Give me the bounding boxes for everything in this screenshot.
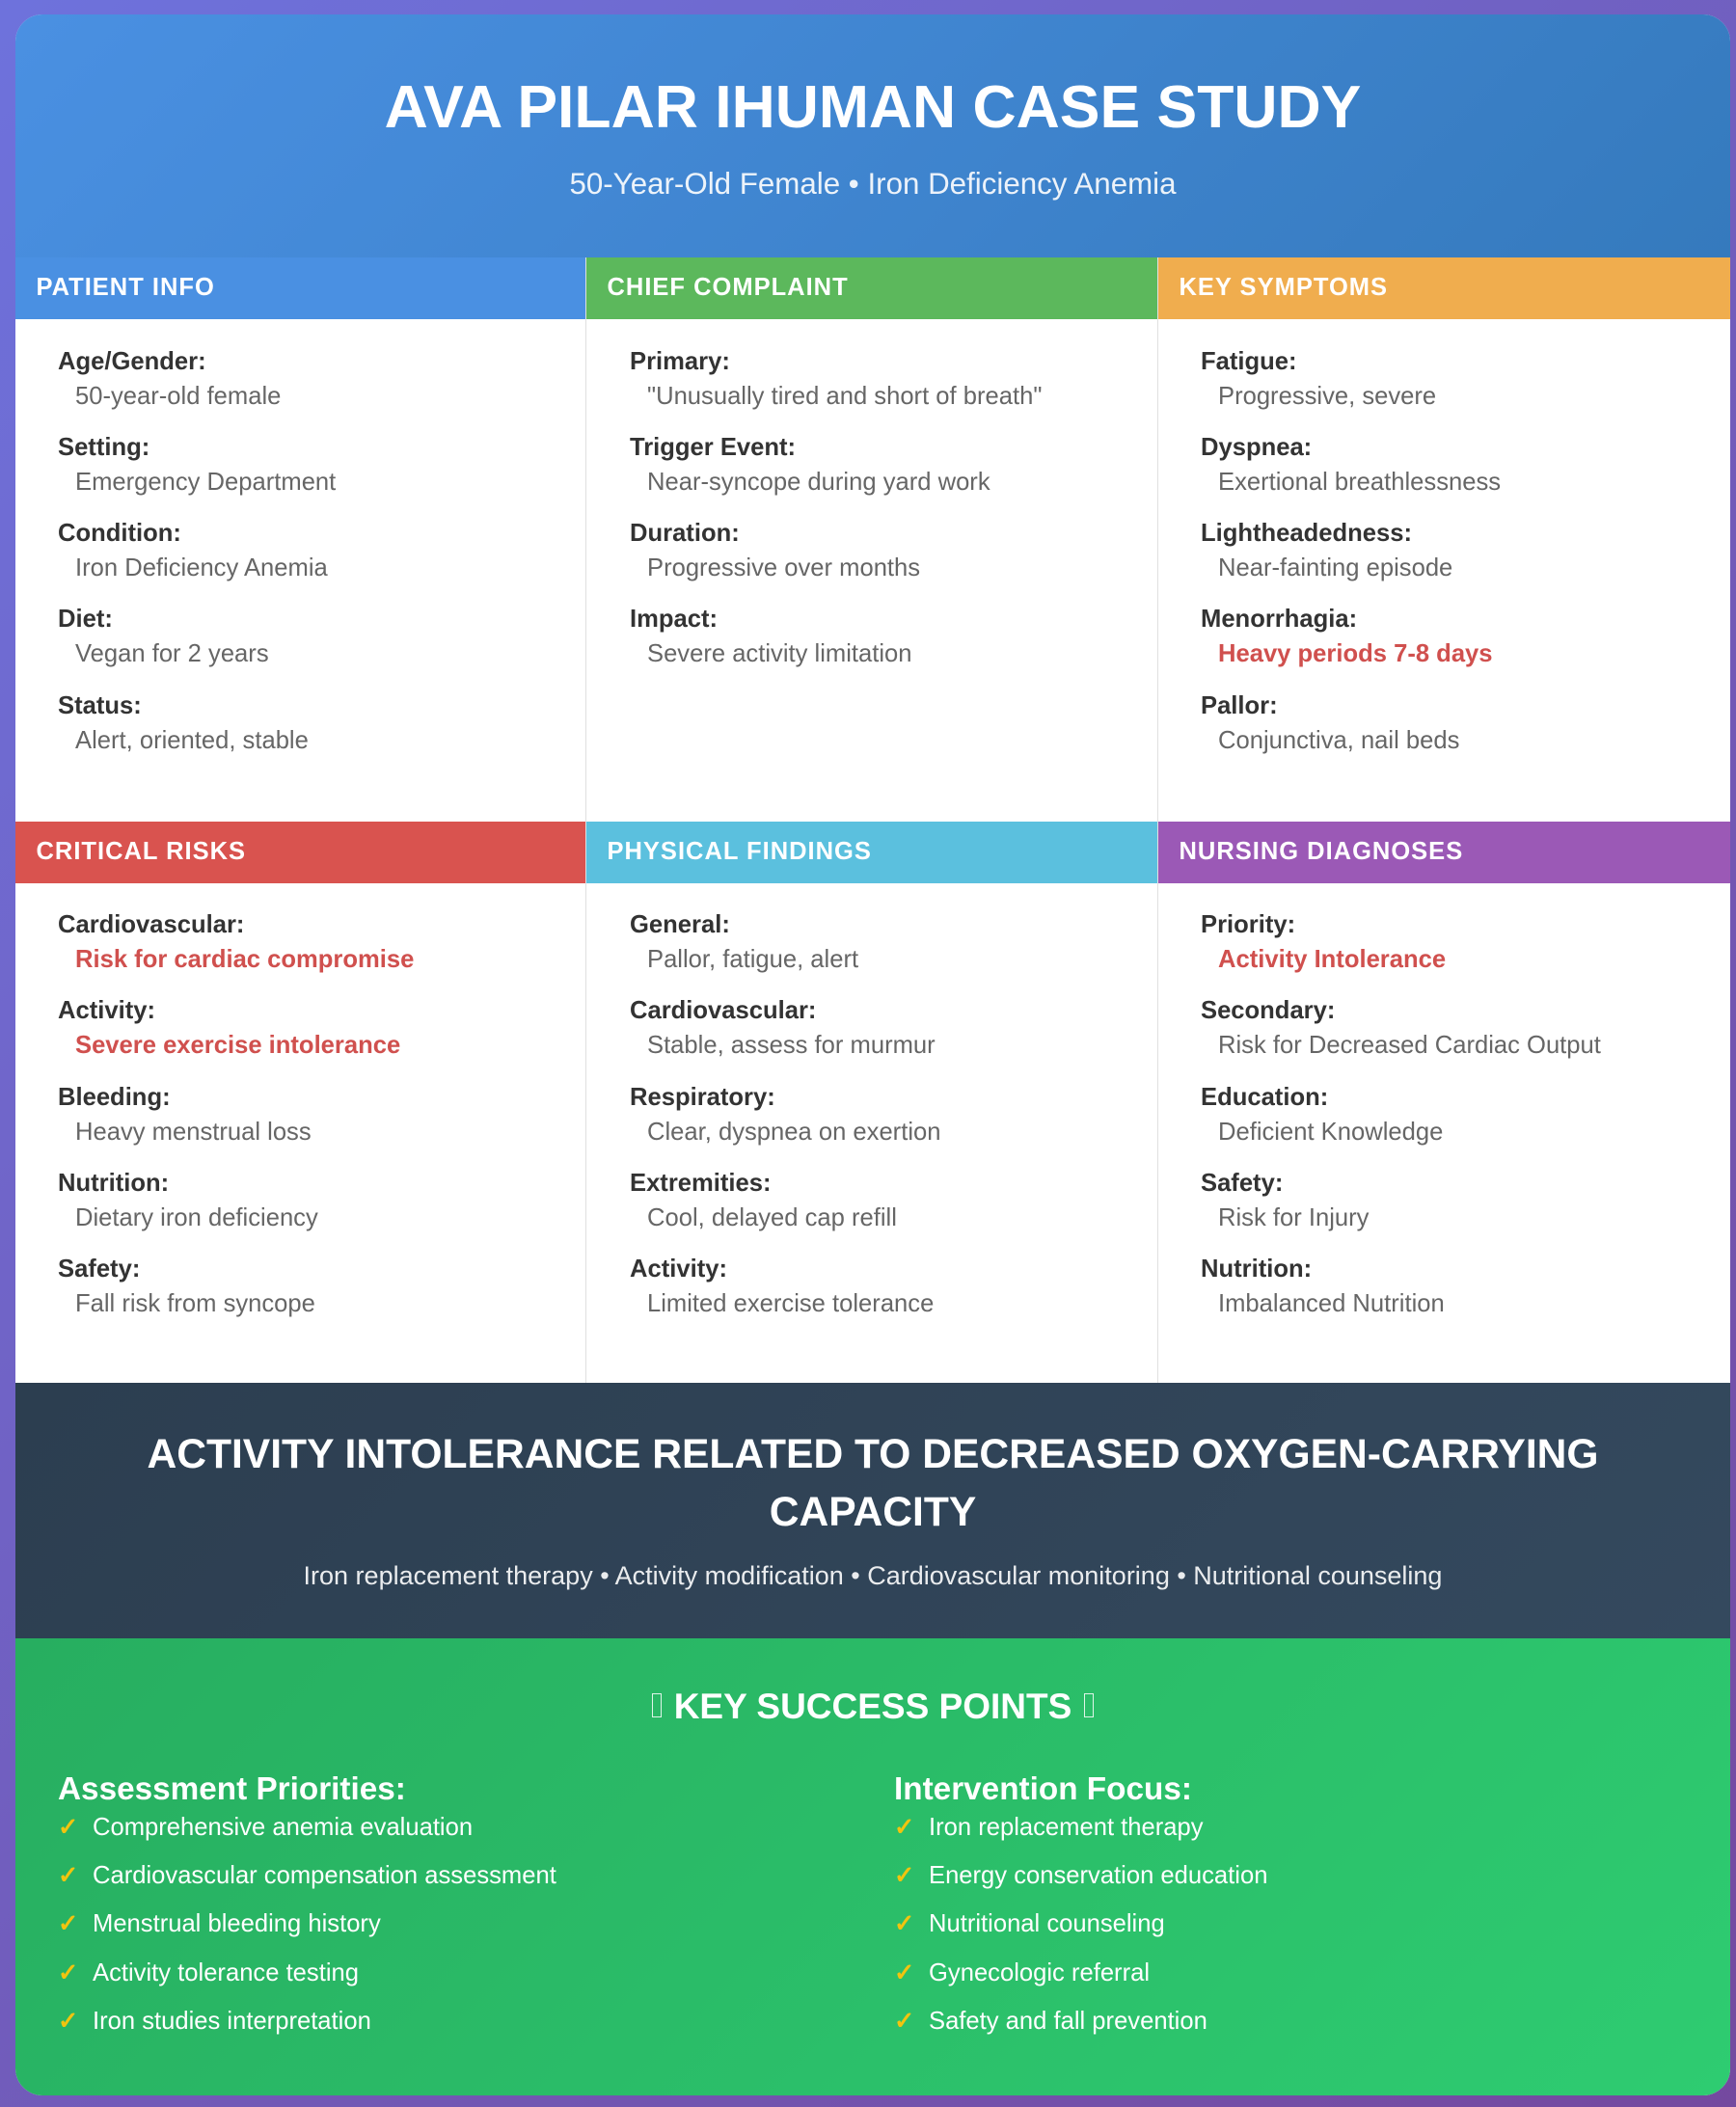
text block: chief complaint: Primary: — [630, 348, 730, 375]
text block: nursing diagnoses: Deficient Knowledge — [1218, 1119, 1443, 1146]
column: intervention focus: Nutritional counseling — [929, 1910, 1165, 1937]
column: intervention focus: ✓ — [894, 2008, 914, 2035]
text block: key symptoms: Heavy periods 7-8 days — [1218, 640, 1493, 667]
text block: chief complaint — [630, 348, 1042, 667]
text block: key symptoms: Pallor: — [1201, 692, 1278, 719]
text block: nursing diagnoses: Activity Intolerance — [1218, 946, 1446, 973]
text block: critical risks: Dietary iron deficiency — [75, 1204, 318, 1231]
text block: key symptoms: Menorrhagia: — [1201, 606, 1357, 633]
text block: physical findings: Pallor, fatigue, alert — [647, 946, 858, 973]
text block: nursing diagnoses: Safety: — [1201, 1170, 1283, 1197]
column: intervention focus: Safety and fall prevention — [929, 2008, 1207, 2035]
column: assessment priorities: Menstrual bleeding history — [93, 1910, 381, 1937]
heading: nursing diagnoses: NURSING DIAGNOSES — [1179, 837, 1463, 864]
text block: nursing diagnoses: Risk for Injury — [1218, 1204, 1369, 1231]
heading: patient info: PATIENT INFO — [37, 274, 215, 301]
panel: physical findings — [586, 822, 1158, 1383]
text block: critical risks: Bleeding: — [58, 1084, 171, 1111]
text block: critical risks: Nutrition: — [58, 1170, 169, 1197]
text block: physical findings: Respiratory: — [630, 1084, 775, 1111]
text block: critical risks — [58, 911, 414, 1317]
column: assessment priorities: Activity tolerance testing — [93, 1959, 359, 1986]
text block: patient info: Age/Gender: — [58, 348, 206, 375]
text block: nursing diagnoses: Priority: — [1201, 911, 1295, 938]
heading: critical risks: CRITICAL RISKS — [37, 837, 246, 864]
text block: key symptoms: Near-fainting episode — [1218, 554, 1452, 581]
column: assessment priorities: ✓ — [58, 1862, 78, 1889]
text block: nursing diagnoses: Imbalanced Nutrition — [1218, 1290, 1445, 1317]
text block: critical risks: Fall risk from syncope — [75, 1290, 315, 1317]
text block: patient info: Iron Deficiency Anemia — [75, 554, 328, 581]
text block: chief complaint: Near-syncope during yard work — [647, 469, 990, 496]
text block: patient info: Setting: — [58, 434, 149, 461]
heading: physical findings: PHYSICAL FINDINGS — [608, 837, 872, 864]
column: intervention focus: Gynecologic referral — [929, 1959, 1150, 1986]
text block: chief complaint: "Unusually tired and short of breath" — [647, 383, 1042, 410]
text block: key symptoms: Progressive, severe — [1218, 383, 1436, 410]
text block: key symptoms: Exertional breathlessness — [1218, 469, 1501, 496]
column: assessment priorities: ✓ — [58, 1959, 78, 1986]
heading: key symptoms: KEY SYMPTOMS — [1179, 274, 1388, 301]
heading: priority diagnosis: ACTIVITY INTOLERANCE RELATED TO DECREASED OXYGEN-CARRYING CAPACITY — [147, 1431, 1599, 1535]
text block: patient info: Condition: — [58, 520, 181, 547]
text block: critical risks: Cardiovascular: — [58, 911, 244, 938]
column: assessment priorities: ✓ — [58, 2008, 78, 2035]
column: intervention focus: Energy conservation education — [929, 1862, 1267, 1889]
text block: key symptoms: Fatigue: — [1201, 348, 1297, 375]
panel: priority diagnosis banner — [15, 1383, 1730, 1638]
text block: key symptoms: Lightheadedness: — [1201, 520, 1412, 547]
column: intervention focus: ✓ — [894, 1862, 914, 1889]
text block: key symptoms: Dyspnea: — [1201, 434, 1312, 461]
text block: critical risks: Heavy menstrual loss — [75, 1119, 312, 1146]
text block: critical risks: Activity: — [58, 997, 155, 1024]
heading: nursing diagnoses — [1158, 822, 1730, 883]
text block: physical findings: Limited exercise tolerance — [647, 1290, 934, 1317]
column: assessment priorities: Assessment Priorities: — [58, 1771, 406, 1807]
text block: chief complaint: Progressive over months — [647, 554, 920, 581]
text block: critical risks: Risk for cardiac compromise — [75, 946, 414, 973]
text block: patient info: Vegan for 2 years — [75, 640, 269, 667]
column: intervention focus — [894, 1771, 1267, 2035]
column: assessment priorities — [58, 1771, 556, 2035]
text block: critical risks: Safety: — [58, 1256, 140, 1283]
heading: key symptoms — [1158, 257, 1730, 319]
text block: patient info: 50-year-old female — [75, 383, 281, 410]
text block: interventions summary: Iron replacement therapy • Activity modification • Cardiovascular monitoring • Nutritional counseling — [304, 1561, 1442, 1590]
panel: key success points — [15, 1638, 1730, 2095]
panel: chief complaint — [586, 257, 1158, 822]
heading: patient info — [15, 257, 585, 319]
heading: physical findings — [586, 822, 1157, 883]
subtitle: 50-Year-Old Female • Iron Deficiency Anemia — [569, 167, 1177, 201]
heading: critical risks — [15, 822, 585, 883]
column: assessment priorities: ✓ — [58, 1814, 78, 1841]
text block: nursing diagnoses: Education: — [1201, 1084, 1328, 1111]
column: intervention focus: ✓ — [894, 1959, 914, 1986]
text block: patient info: Status: — [58, 692, 142, 719]
column: assessment priorities: Comprehensive anemia evaluation — [93, 1814, 473, 1841]
text block: chief complaint: Severe activity limitation — [647, 640, 912, 667]
text block: patient info: Emergency Department — [75, 469, 336, 496]
text block: nursing diagnoses: Risk for Decreased Cardiac Output — [1218, 1032, 1601, 1059]
panel: critical risks — [15, 822, 586, 1383]
text block: chief complaint: Trigger Event: — [630, 434, 796, 461]
text block: key symptoms: Conjunctiva, nail beds — [1218, 727, 1459, 754]
text block: nursing diagnoses — [1201, 911, 1601, 1317]
text block: physical findings: Stable, assess for murmur — [647, 1032, 936, 1059]
icon: missing-glyph box left — [652, 1693, 662, 1717]
text block: patient info — [58, 348, 336, 754]
icon: missing-glyph box right — [1084, 1693, 1094, 1717]
header banner — [15, 14, 1730, 257]
column: intervention focus: Iron replacement therapy — [929, 1814, 1204, 1841]
text block: key symptoms — [1201, 348, 1501, 754]
heading: chief complaint — [586, 257, 1157, 319]
text block: critical risks: Severe exercise intolerance — [75, 1032, 400, 1059]
column: assessment priorities: Iron studies interpretation — [93, 2008, 371, 2035]
panel: key symptoms — [1158, 257, 1730, 822]
text block: chief complaint: Impact: — [630, 606, 718, 633]
heading: key success points: KEY SUCCESS POINTS — [674, 1686, 1071, 1726]
panel: nursing diagnoses — [1158, 822, 1730, 1383]
column: assessment priorities: ✓ — [58, 1910, 78, 1937]
text block: physical findings: Cool, delayed cap refill — [647, 1204, 897, 1231]
text block: physical findings — [630, 911, 940, 1317]
text block: patient info: Diet: — [58, 606, 113, 633]
text block: physical findings: Cardiovascular: — [630, 997, 816, 1024]
column: intervention focus: Intervention Focus: — [894, 1771, 1192, 1807]
heading: chief complaint: CHIEF COMPLAINT — [608, 274, 849, 301]
text block: physical findings: Activity: — [630, 1256, 727, 1283]
text block: chief complaint: Duration: — [630, 520, 740, 547]
column: intervention focus: ✓ — [894, 1814, 914, 1841]
text block: nursing diagnoses: Secondary: — [1201, 997, 1335, 1024]
title: AVA PILAR IHUMAN CASE STUDY — [385, 73, 1361, 141]
column: intervention focus: ✓ — [894, 1910, 914, 1937]
column: assessment priorities: Cardiovascular compensation assessment — [93, 1862, 556, 1889]
text block: physical findings: Clear, dyspnea on exertion — [647, 1119, 940, 1146]
text block: nursing diagnoses: Nutrition: — [1201, 1256, 1312, 1283]
panel: patient info — [15, 257, 586, 822]
text block: physical findings: Extremities: — [630, 1170, 772, 1197]
text block: patient info: Alert, oriented, stable — [75, 727, 309, 754]
text block: physical findings: General: — [630, 911, 730, 938]
